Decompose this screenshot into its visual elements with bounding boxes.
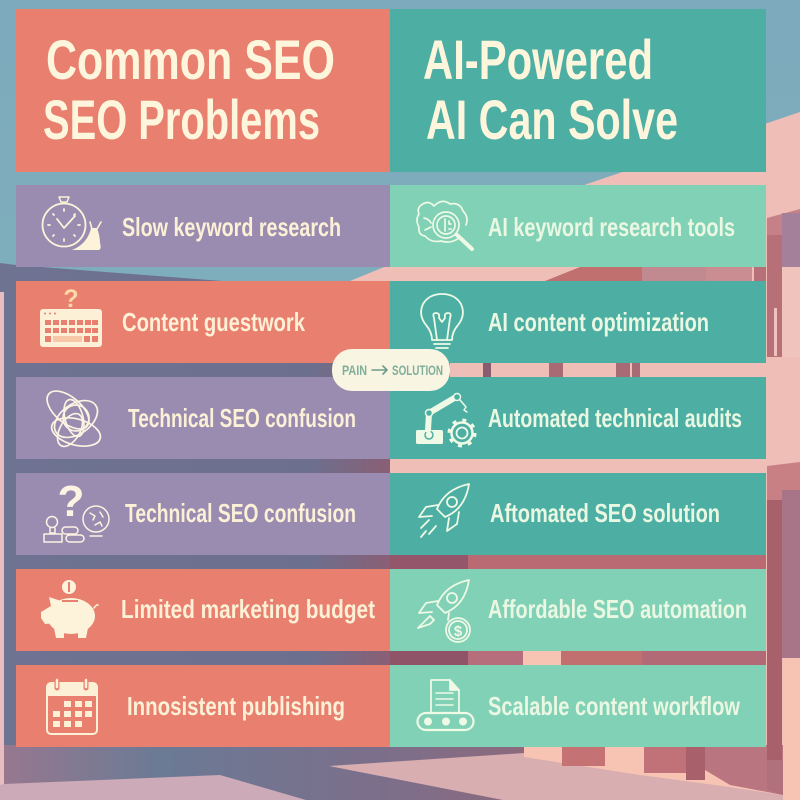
- icon: question mark, lamp, pills and globe: [44, 477, 109, 542]
- icon: robot arm and gear: [416, 394, 475, 446]
- label: Limited marketing budget: [121, 594, 375, 624]
- label: Technical SEO confusion: [128, 403, 356, 433]
- icon: rocket: [419, 484, 469, 537]
- row: automated SEO solution: [390, 473, 766, 555]
- row: technical SEO confusion: [16, 377, 390, 459]
- label: AI content optimization: [488, 307, 709, 337]
- icon: keyboard with question mark: ?: [63, 285, 79, 313]
- heading: AI-Powered AI Can Solve: [423, 28, 678, 151]
- heading: Common SEO Problems: [43, 28, 335, 151]
- icon: stopwatch and snail: [42, 197, 101, 250]
- panel: right header: [390, 9, 766, 172]
- row: inconsistent publishing: [16, 665, 390, 747]
- badge: pain to solution: SOLUTION: [392, 362, 443, 378]
- label: Content guestwork: [122, 307, 305, 337]
- icon: keyboard with question mark: [40, 285, 102, 347]
- label: Innosistent publishing: [127, 691, 345, 721]
- heading: Common SEO Problems: SEO Problems: [43, 88, 320, 151]
- row: AI content optimization: [390, 281, 766, 363]
- row: scalable content workflow: [390, 665, 766, 747]
- icon: brain with magnifier: [417, 201, 472, 249]
- heading: Common SEO Problems: Common SEO: [46, 28, 335, 91]
- row: technical SEO confusion repeat: [16, 473, 390, 555]
- heading: AI-Powered AI Can Solve: AI-Powered: [423, 28, 653, 91]
- icon: calendar: [47, 679, 97, 734]
- label: Aftomated SEO solution: [490, 498, 720, 528]
- icon: rocket with dollar coin: [418, 580, 470, 642]
- row: content guesswork: [16, 281, 390, 363]
- badge: pain to solution: PAIN: [342, 362, 367, 378]
- panel: left header: [16, 9, 390, 172]
- icon: tangled scribble: [40, 384, 104, 451]
- label: Technical SEO confusion: [125, 498, 356, 528]
- label: Slow keyword research: [122, 212, 341, 242]
- icon: document on conveyor belt: [418, 680, 474, 730]
- row: automated technical audits: [390, 377, 766, 459]
- icon: rocket with dollar coin: $: [454, 623, 463, 640]
- row: AI keyword research tools: [390, 185, 766, 267]
- badge: pain to solution: [332, 349, 450, 391]
- icon: question mark, lamp, pills and globe: ?: [58, 477, 84, 526]
- icon: piggy bank and coin: [41, 580, 98, 638]
- row: limited marketing budget: [16, 569, 390, 651]
- row: slow keyword research: [16, 185, 390, 267]
- row: affordable SEO automation: [390, 569, 766, 651]
- heading: AI-Powered AI Can Solve: AI Can Solve: [426, 88, 678, 151]
- icon: lightbulb: [421, 294, 463, 348]
